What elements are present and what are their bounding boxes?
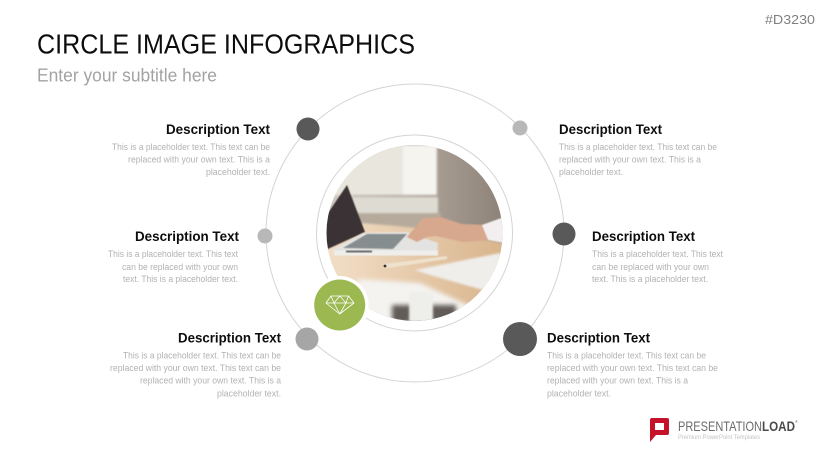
blurred foreground [350, 279, 470, 323]
outer ring [266, 84, 564, 382]
green diamond badge [311, 276, 369, 334]
text block: bottom right: Description Text [547, 330, 650, 346]
text block: middle right: Description Text [592, 228, 695, 244]
logo: PresentationLoad: Premium PowerPoint Templates [678, 435, 760, 441]
text block: bottom left: replaced with your own text. This text can be [110, 363, 281, 373]
node: bottom left [296, 328, 318, 350]
text block: middle left: Description Text [135, 228, 239, 244]
logo: PresentationLoad [650, 418, 798, 442]
node: top right [512, 120, 528, 136]
text block: bottom left: placeholder text. [217, 388, 281, 398]
text block: top left: This is a placeholder text. This text can be [112, 142, 270, 152]
text block: top left [112, 121, 270, 177]
text block: top right [559, 121, 717, 177]
pen [385, 256, 447, 268]
text block: top left: placeholder text. [206, 167, 270, 177]
text block: middle left: text. This is a placeholder text. [123, 274, 238, 284]
node: middle left [258, 228, 272, 244]
text block: top right: replaced with your own text. This is a [559, 154, 701, 164]
inner ring [316, 135, 512, 331]
icon: diamond [326, 296, 354, 314]
text block: bottom left: Description Text [178, 330, 281, 346]
text block: top right: placeholder text. [559, 167, 623, 177]
text block: bottom right: This is a placeholder text. This text can be [547, 350, 706, 360]
text block: middle left: This is a placeholder text. This text [108, 249, 239, 259]
icon: logo mark [650, 418, 669, 442]
node: bottom right [503, 322, 537, 356]
laptop base [333, 232, 438, 251]
text block: bottom right: replaced with your own text. This text can be [547, 363, 718, 373]
text block: middle right: can be replaced with your own [592, 262, 709, 272]
text block: top left: Description Text [166, 121, 270, 137]
laptop screen [326, 185, 365, 250]
node: middle right [552, 222, 576, 246]
title: CIRCLE IMAGE INFOGRAPHICS [37, 28, 415, 60]
document code: #D3230 [765, 13, 815, 27]
logo: PresentationLoad: ® [795, 419, 798, 424]
text block: top right: This is a placeholder text. This text can be [559, 142, 717, 152]
logo: PresentationLoad: LOAD [762, 418, 795, 434]
text block: bottom left [110, 330, 281, 398]
text block: bottom right: placeholder text. [547, 388, 611, 398]
logo: PresentationLoad: PRESENTATION [678, 418, 762, 434]
text block: middle right: text. This is a placeholder text. [592, 274, 708, 284]
text block: bottom right: replaced with your own text. This is a [547, 376, 688, 386]
text block: middle right [592, 228, 724, 284]
text block: top right: Description Text [559, 121, 662, 137]
text block: bottom left: replaced with your own text. This is a [140, 376, 281, 386]
hand [407, 217, 488, 242]
central photo: laptop on desk [326, 145, 504, 323]
text block: top left: replaced with your own text. This is a [128, 154, 270, 164]
node: top left [296, 118, 320, 140]
text block: bottom right [547, 330, 718, 398]
subtitle: Enter your subtitle here [37, 66, 217, 86]
text block: middle left [108, 228, 239, 284]
text block: middle left: can be replaced with your own [122, 262, 238, 272]
text block: middle right: This is a placeholder text. This text [592, 249, 724, 259]
text block: bottom left: This is a placeholder text. This text can be [123, 350, 281, 360]
papers [415, 253, 504, 290]
